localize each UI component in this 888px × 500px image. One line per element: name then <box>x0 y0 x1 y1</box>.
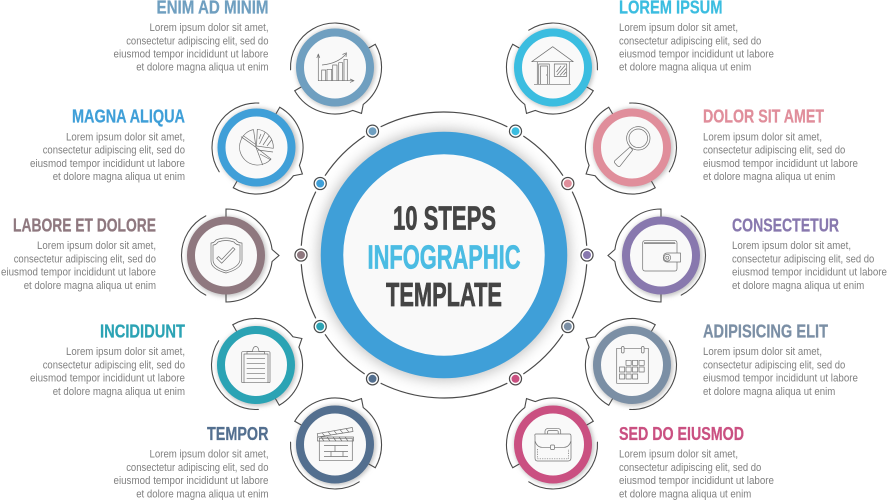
heading: ADIPISICING ELIT <box>703 320 829 342</box>
text block: Lorem ipsum dolor sit amet, <box>66 346 185 358</box>
heading: MAGNA ALIQUA <box>72 106 185 127</box>
text block: Lorem ipsum dolor sit amet, <box>732 240 851 252</box>
step: magna aliqua <box>30 85 326 214</box>
text block: eiusmod tempor incididunt ut labore <box>114 475 268 487</box>
text block: eiusmod tempor incididunt ut labore <box>30 158 185 170</box>
text block: et dolore magna aliqua ut enim <box>619 62 751 74</box>
text block: Lorem ipsum dolor sit amet, <box>150 449 268 461</box>
step: lorem ipsum <box>486 0 774 137</box>
text block: consectetur adipiscing elit, sed do <box>619 462 761 474</box>
text block: consectetur adipiscing elit, sed do <box>126 35 268 47</box>
text block: consectetur adipiscing elit, sed do <box>703 145 845 157</box>
step: tempor <box>114 375 402 500</box>
icon: house <box>532 47 573 84</box>
connector dots <box>295 125 593 385</box>
text block: Lorem ipsum dolor sit amet, <box>619 22 738 34</box>
icon: magnifying glass <box>614 127 650 166</box>
text block: consectetur adipiscing elit, sed do <box>14 254 156 266</box>
step: adipisicing elit <box>563 298 858 428</box>
text block <box>619 22 774 74</box>
text block: et dolore magna aliqua ut enim <box>53 386 185 398</box>
icon: pie chart <box>240 129 273 165</box>
text block <box>619 449 774 500</box>
icon: wallet <box>643 241 680 271</box>
text block <box>114 449 268 500</box>
text block: consectetur adipiscing elit, sed do <box>703 360 845 372</box>
text block <box>30 131 185 183</box>
text block: Lorem ipsum dolor sit amet, <box>703 346 822 358</box>
text block <box>30 346 185 398</box>
central title: TEMPLATE <box>386 277 502 314</box>
central title: INFOGRAPHIC <box>368 239 520 276</box>
text block: Lorem ipsum dolor sit amet, <box>150 22 268 34</box>
icon: bar chart <box>317 53 354 82</box>
text block: et dolore magna aliqua ut enim <box>732 280 864 292</box>
text block: eiusmod tempor incididunt ut labore <box>619 475 774 487</box>
icon: clapperboard <box>317 428 354 461</box>
text block: et dolore magna aliqua ut enim <box>24 280 156 292</box>
text block <box>703 346 858 398</box>
text block: consectetur adipiscing elit, sed do <box>43 360 185 372</box>
text block: Lorem ipsum dolor sit amet, <box>703 131 822 143</box>
text block: et dolore magna aliqua ut enim <box>53 171 185 183</box>
text block <box>703 131 858 183</box>
text block <box>114 22 268 74</box>
text block: eiusmod tempor incididunt ut labore <box>1 267 156 279</box>
text block <box>1 240 156 292</box>
text block: consectetur adipiscing elit, sed do <box>126 462 268 474</box>
heading: DOLOR SIT AMET <box>703 106 825 127</box>
step: consectetur <box>608 209 887 302</box>
text block: Lorem ipsum dolor sit amet, <box>66 131 185 143</box>
icon: calendar <box>617 346 648 383</box>
step: enim ad minim <box>114 0 402 137</box>
text block: Lorem ipsum dolor sit amet, <box>619 449 738 461</box>
text block: et dolore magna aliqua ut enim <box>703 386 835 398</box>
text block: consectetur adipiscing elit, sed do <box>43 145 185 157</box>
step: sed do eiusmod <box>486 375 774 500</box>
step: labore et dolore <box>1 209 279 302</box>
step: dolor sit amet <box>563 85 858 214</box>
step: incididunt <box>30 298 325 428</box>
icon: shield with check <box>211 238 242 273</box>
text block: eiusmod tempor incididunt ut labore <box>619 48 774 60</box>
central hub <box>292 103 596 407</box>
icon: briefcase <box>535 428 571 461</box>
blue ring <box>332 143 556 367</box>
heading: CONSECTETUR <box>732 214 839 236</box>
text block: eiusmod tempor incididunt ut labore <box>114 48 268 60</box>
heading: LABORE ET DOLORE <box>13 214 156 236</box>
central title <box>368 200 520 314</box>
heading: TEMPOR <box>207 423 268 444</box>
text block: et dolore magna aliqua ut enim <box>136 62 268 74</box>
text block: eiusmod tempor incididunt ut labore <box>30 373 185 385</box>
heading: INCIDIDUNT <box>100 320 186 342</box>
central title: 10 STEPS <box>393 200 496 237</box>
text block: eiusmod tempor incididunt ut labore <box>703 158 858 170</box>
segmented outer arc <box>292 103 596 407</box>
text block: consectetur adipiscing elit, sed do <box>619 35 761 47</box>
icon: clipboard <box>242 346 270 383</box>
text block: eiusmod tempor incididunt ut labore <box>703 373 858 385</box>
text block <box>732 240 887 292</box>
text block: et dolore magna aliqua ut enim <box>703 171 835 183</box>
heading: SED DO EIUSMOD <box>619 423 744 444</box>
text block: Lorem ipsum dolor sit amet, <box>37 240 156 252</box>
